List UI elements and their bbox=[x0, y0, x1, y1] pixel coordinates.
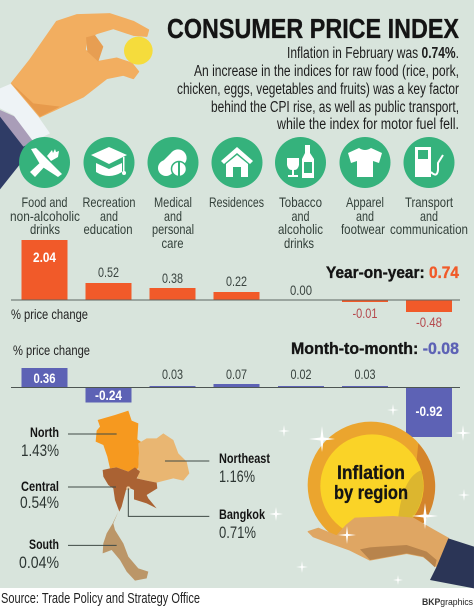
map labels: North: 1.43% bbox=[21, 441, 59, 460]
label: % price change (year-on-year): % price change bbox=[11, 306, 88, 322]
icon: fuel pump bbox=[404, 137, 454, 188]
icon: pills bbox=[148, 137, 198, 188]
category labels: Transport bbox=[405, 194, 453, 210]
icon: t-shirt bbox=[340, 137, 390, 188]
map labels: Northeast: 1.16% bbox=[219, 467, 255, 486]
category labels: drinks bbox=[284, 235, 314, 251]
category labels: Residences bbox=[209, 194, 264, 210]
map labels: Central bbox=[20, 478, 59, 512]
map labels: South: 0.04% bbox=[19, 553, 59, 572]
map labels: South: South bbox=[29, 536, 59, 552]
map labels: Central: Central bbox=[21, 478, 59, 494]
map labels: Bangkok: 0.71% bbox=[219, 523, 256, 542]
category labels: Medical bbox=[154, 194, 192, 210]
bar chart: year-on-year: 0.22 bbox=[226, 273, 247, 289]
icon: graduation cap bbox=[84, 137, 134, 188]
bar chart: year-on-year: 0.38 bbox=[162, 270, 183, 286]
coin label: Inflation bbox=[337, 463, 405, 484]
category labels: Apparel bbox=[346, 194, 384, 210]
category labels: and bbox=[356, 208, 374, 224]
bar chart: month-to-month: 0.03 bbox=[162, 366, 183, 382]
bar chart: year-on-year bbox=[11, 240, 460, 330]
bar chart: month-to-month: 0.07 bbox=[226, 366, 247, 382]
region: bangkok bbox=[126, 486, 130, 490]
category labels: non-alcoholic bbox=[10, 208, 80, 224]
bar chart: year-on-year: 0.00 bbox=[290, 282, 312, 298]
coin label: by region bbox=[334, 483, 408, 504]
icon: food and drinks bbox=[19, 137, 70, 188]
category labels: and bbox=[164, 208, 182, 224]
map: Thailand regions bbox=[68, 411, 209, 581]
category labels: and bbox=[100, 208, 118, 224]
heading: month-to-month: Month-to-month: -0.08 bbox=[291, 339, 459, 358]
region: north bbox=[96, 411, 143, 472]
bar chart: year-on-year: 2.04 bbox=[33, 249, 56, 265]
region: south bbox=[103, 512, 148, 581]
bar chart: year-on-year: 0.52 bbox=[98, 264, 119, 280]
category labels: drinks bbox=[30, 221, 60, 237]
region: northeast bbox=[137, 433, 189, 483]
category labels: alcoholic bbox=[278, 221, 323, 237]
bar chart: year-on-year: -0.01 bbox=[352, 305, 378, 321]
bar chart: month-to-month: 0.36 bbox=[34, 370, 56, 386]
region: central bbox=[103, 467, 157, 512]
bar chart: month-to-month: -0.92 bbox=[416, 403, 443, 419]
intro text: Inflation in February was 0.74%. bbox=[287, 45, 459, 62]
illustration: coin on hand bbox=[308, 422, 474, 588]
bar chart: month-to-month: 0.02 bbox=[290, 366, 312, 382]
bar chart: year-on-year: -0.48 bbox=[416, 314, 442, 330]
map labels: Bangkok bbox=[219, 506, 265, 542]
category labels: Food and bbox=[22, 194, 68, 210]
coin label bbox=[334, 463, 408, 504]
category labels bbox=[10, 194, 468, 251]
icon: wine and bottle bbox=[275, 137, 326, 188]
category labels: care bbox=[162, 235, 184, 251]
bar chart: month-to-month bbox=[11, 366, 460, 437]
icon: house bbox=[212, 137, 262, 188]
map labels: South bbox=[19, 536, 59, 572]
illustration: hand holding coin bbox=[0, 14, 153, 189]
map labels: Northeast bbox=[219, 450, 270, 486]
category labels: education bbox=[84, 221, 132, 237]
map labels: North bbox=[21, 424, 59, 460]
sparkles bbox=[269, 404, 471, 585]
category labels: personal bbox=[152, 221, 194, 237]
source: Source: Trade Policy and Strategy Office bbox=[1, 591, 200, 607]
leader lines bbox=[68, 434, 209, 545]
category labels: Recreation bbox=[82, 194, 136, 210]
intro text bbox=[177, 45, 459, 133]
category labels: footwear bbox=[341, 221, 385, 237]
map labels: Bangkok: Bangkok bbox=[219, 506, 265, 522]
category labels: and bbox=[420, 208, 438, 224]
map labels: Central: 0.54% bbox=[20, 493, 59, 512]
label: % price change (month-to-month): % price change bbox=[13, 342, 90, 358]
bar chart: month-to-month: -0.24 bbox=[95, 387, 122, 403]
category labels: Tobacco bbox=[279, 194, 322, 210]
map labels: North: North bbox=[30, 424, 59, 440]
category labels: and bbox=[292, 208, 310, 224]
map labels: Northeast: Northeast bbox=[219, 450, 270, 466]
heading: year-on-year: Year-on-year: 0.74 bbox=[326, 263, 459, 282]
bar chart: month-to-month: 0.03 bbox=[354, 366, 376, 382]
